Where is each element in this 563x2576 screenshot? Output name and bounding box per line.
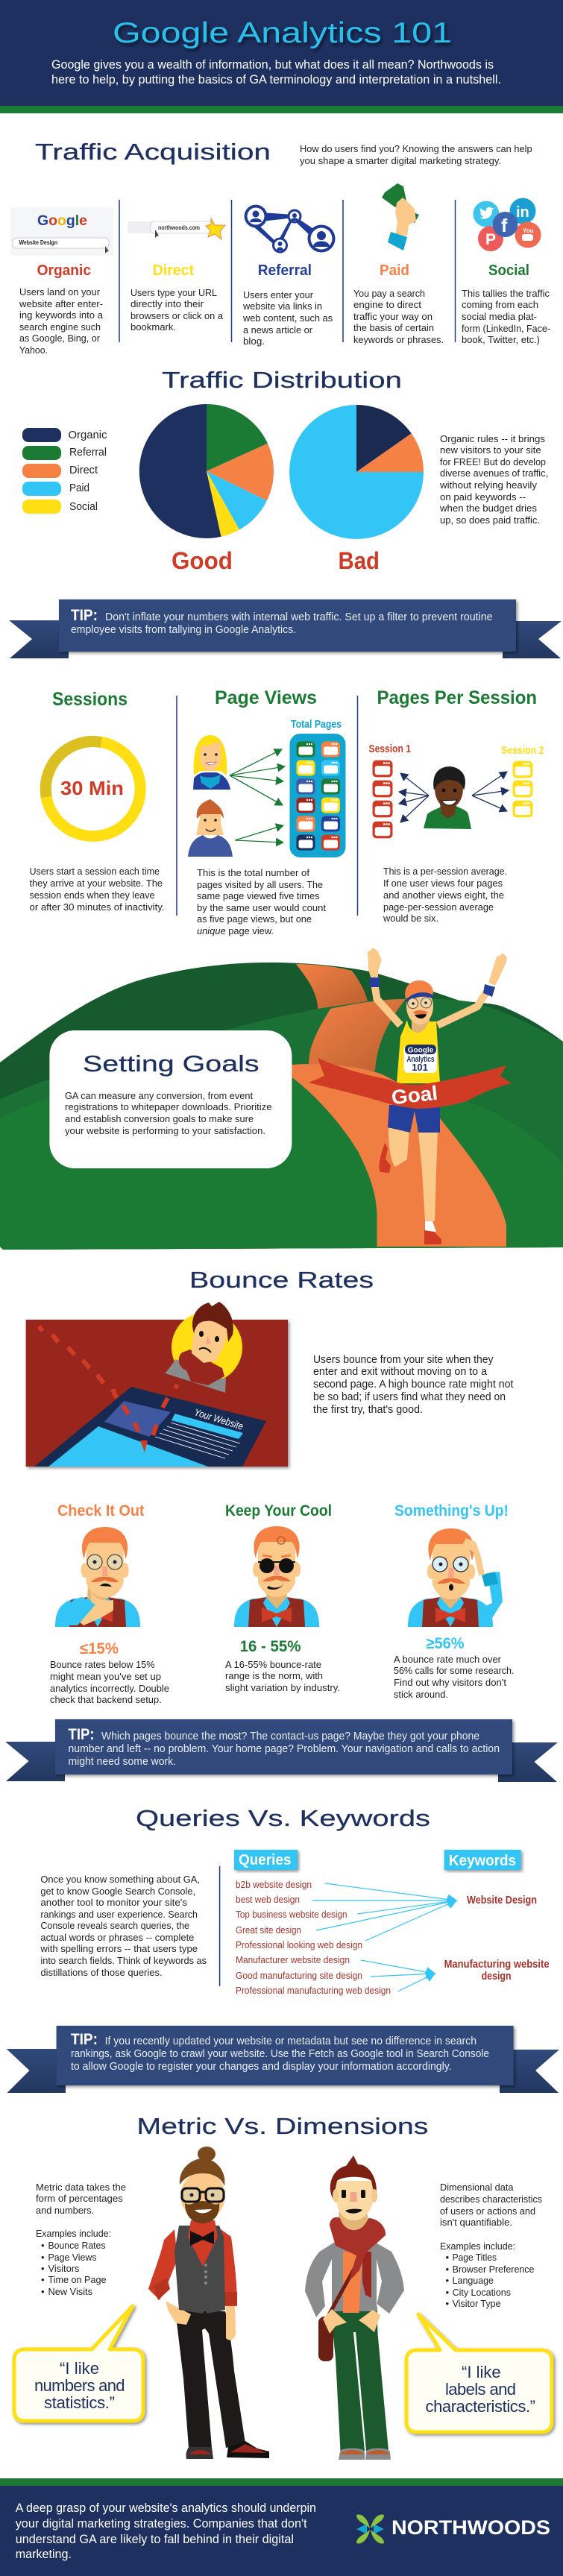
organic text: as Google, Bing, or [19, 333, 101, 344]
footer band [0, 2478, 563, 2576]
queries text: distillations of those queries. [40, 1967, 163, 1978]
speech bubble: dimensions: characteristics.” [425, 2397, 536, 2416]
icon: social bubbles: You [523, 227, 534, 234]
dimensions text: Visitor Type [453, 2298, 501, 2309]
dimensions text: City Locations [453, 2287, 511, 2298]
character: dimension man [305, 2155, 404, 2460]
page views text: as five page views, but one [197, 913, 312, 925]
something's up text: stick around. [394, 1689, 448, 1700]
distribution text: on paid keywords -- [440, 491, 526, 503]
distribution text: Organic rules -- it brings [440, 433, 545, 444]
dimensions text [440, 2182, 542, 2309]
distribution text: for FREE! But do develop [440, 456, 546, 467]
bounce rates text: enter and exit without moving on to a [313, 1366, 488, 1378]
dimensions text: Browser Preference [453, 2264, 534, 2275]
website window [34, 1387, 266, 1467]
panel: paid [353, 183, 444, 345]
heading: check it out: Check It Out [57, 1502, 145, 1520]
heading: keep your cool: Keep Your Cool [225, 1502, 332, 1520]
total pages grid: Total Pages [291, 719, 342, 731]
sessions text [30, 866, 164, 913]
paid text: the basis of certain [353, 322, 434, 333]
setting goals text: registrations to whitepaper downloads. Prioritize [65, 1101, 271, 1112]
metric text: Visitors [48, 2263, 80, 2274]
tip banner 3: If you recently updated your website or metadata but see no difference in search [105, 2035, 476, 2047]
sessions text: session ends when they leave [30, 889, 155, 901]
distribution text [439, 433, 548, 526]
metric text: New Visits [48, 2286, 92, 2297]
arrows: session [399, 772, 509, 822]
keep your cool text: slight variation by industry. [225, 1682, 340, 1693]
total pages grid [289, 719, 346, 857]
referral text: a news article or [243, 324, 313, 336]
referral text: website via links in [242, 300, 322, 312]
check it out text: Bounce rates below 15% [50, 1659, 155, 1670]
icon: address bar: northwoods.com [158, 224, 200, 231]
runner [368, 948, 507, 1244]
header band [0, 0, 563, 113]
header intro text: Google gives you a wealth of information, but what does it all mean? Northwoods is [51, 58, 494, 72]
dimensions text: of users or actions and [440, 2205, 535, 2217]
icon: google search: Google [37, 213, 87, 229]
tip banner 2: number and left -- no problem. Your home page? Problem. Your navigation and calls to action [69, 1743, 500, 1755]
tip banner 2: might need some work. [69, 1756, 176, 1768]
icon: social bubbles: P [485, 231, 496, 248]
organic text: search engine such [19, 321, 101, 333]
character: sunglasses [234, 1526, 319, 1627]
referral text: web content, such as [242, 312, 333, 324]
legend [22, 428, 107, 514]
panel: direct [128, 218, 225, 333]
page views text: pages visited by all users. The [197, 879, 323, 890]
direct text: directly into their [130, 298, 204, 309]
page views text: This is the total number of [197, 867, 309, 878]
heading: setting goals: Setting Goals [83, 1051, 260, 1077]
bounce rates text: be so bad; if users find what they need on [313, 1391, 506, 1403]
keyword: manufacturing website design: design [482, 1971, 512, 1983]
runner: Google [408, 1047, 434, 1054]
social text: form (LinkedIn, Face- [462, 323, 550, 334]
tip banner 2: TIP: [69, 1726, 94, 1743]
dimensions text: Language [453, 2275, 494, 2286]
panel: organic [10, 207, 113, 356]
dimensions text: describes characteristics [440, 2194, 542, 2205]
dimensions text: • [446, 2275, 449, 2286]
panel: social [462, 198, 550, 345]
speech bubble: dimensions: labels and [445, 2380, 517, 2399]
speech bubble: metric: numbers and [34, 2376, 125, 2395]
list: queries: b2b website design [236, 1879, 312, 1890]
goal ribbon: Goal [390, 1082, 438, 1109]
logo: northwoods [356, 2514, 550, 2544]
something's up text: 56% calls for some research. [394, 1665, 515, 1676]
heading: queries vs keywords: Queries Vs. Keywords [136, 1805, 430, 1831]
character: thinking [55, 1527, 140, 1627]
dimensions text: • [446, 2264, 449, 2275]
traffic acquisition intro: How do users find you? Knowing the answers can help [300, 143, 532, 154]
sessions text: Users start a session each time [30, 866, 160, 877]
label: direct: Direct [153, 262, 194, 279]
range: 16 to 55 percent: 16 - 55% [240, 1638, 301, 1655]
distribution text: diverse avenues of traffic, [440, 467, 548, 479]
heading: page views: Page Views [215, 687, 317, 708]
label: organic: Organic [37, 262, 91, 279]
organic text [19, 286, 104, 356]
icon: 30 minute ring [45, 741, 140, 837]
social text [462, 288, 550, 345]
keyword: manufacturing website design: Manufacturing website [444, 1959, 550, 1971]
list: queries: Top business website design [236, 1909, 347, 1920]
pie chart: bad [289, 405, 424, 539]
pages per session text: page-per-session average [383, 901, 494, 913]
paid text [353, 288, 444, 345]
keyword: website design: Website Design [467, 1895, 537, 1906]
label: session 2: Session 2 [501, 745, 544, 757]
bounce rates text [313, 1354, 513, 1416]
list: queries: Manufacturer website design [236, 1954, 350, 1965]
keep your cool text: A 16-55% bounce-rate [225, 1659, 321, 1670]
keep your cool text [225, 1659, 340, 1693]
bounce rates text: the first try, that's good. [313, 1404, 423, 1416]
panel: keep your cool [225, 1502, 340, 1693]
organic text: Yahoo. [19, 344, 48, 356]
tip banner 2: Which pages bounce the most? The contact-us page? Maybe they got your phone [101, 1731, 479, 1742]
metric text: • [41, 2286, 45, 2297]
header intro text [51, 58, 501, 86]
heading: sessions: Sessions [52, 689, 128, 710]
dimensions text: • [446, 2252, 449, 2263]
dimensions text: Page Titles [453, 2252, 497, 2263]
paid text: traffic your way on [353, 311, 433, 322]
speech bubble: dimensions: “I like [462, 2363, 502, 2381]
metric text: Time on Page [48, 2274, 106, 2285]
footer text: understand GA are likely to fall behind in their digital [16, 2532, 294, 2546]
traffic acquisition intro: you shape a smarter digital marketing strategy. [300, 155, 501, 166]
range: 56 percent or more: ≥56% [427, 1635, 465, 1652]
page views text [197, 867, 326, 936]
panel: check it out [50, 1502, 169, 1705]
footer text: your digital marketing strategies. Companies that don't [16, 2516, 307, 2531]
paid text: You pay a search [353, 288, 425, 299]
pie chart: good [139, 404, 274, 538]
heading: traffic distribution: Traffic Distribution [162, 367, 402, 393]
list: queries: Good manufacturing site design [236, 1970, 362, 1981]
range: 15 percent or less: ≤15% [80, 1640, 119, 1657]
heading: pages per session: Pages Per Session [377, 687, 537, 708]
speech bubble: metric [14, 2306, 143, 2421]
icon: man in green shirt [424, 766, 471, 829]
road [292, 964, 506, 1247]
referral text: blog. [243, 336, 265, 347]
setting goals text: your website is performing to your satisfaction. [65, 1125, 265, 1136]
icon: 30 minute ring: 30 Min [60, 777, 124, 799]
heading: bounce rates: Bounce Rates [189, 1267, 374, 1293]
pages per session text: If one user views four pages [383, 878, 503, 889]
distribution text: without relying heavily [439, 479, 537, 491]
goal ribbon [309, 1058, 512, 1109]
website window: Your Website [193, 1406, 245, 1432]
title: Google Analytics 101 [113, 17, 452, 49]
icon: google search: Website Design [19, 239, 57, 246]
queries text: get to know Google Search Console, [40, 1886, 195, 1897]
legend: Referral [69, 447, 107, 459]
icon: address bar [128, 218, 225, 239]
keyword: manufacturing website design [444, 1959, 550, 1983]
organic text: Users land on your [19, 286, 101, 297]
tip banner 1 [9, 599, 562, 658]
footer text: marketing. [16, 2547, 72, 2561]
hills [0, 963, 563, 1250]
icon: hand with money [382, 183, 419, 251]
dashed bounce trail [39, 1326, 177, 1452]
label: bad: Bad [339, 547, 380, 574]
tip banner 1: TIP: [71, 607, 98, 624]
social text: book, Twitter, etc.) [462, 334, 540, 345]
box: keywords: Keywords [449, 1853, 516, 1869]
panel: sessions [30, 689, 164, 913]
pages per session text: This is a per-session average. [383, 866, 507, 877]
panel: page views [188, 687, 346, 936]
distribution text: new visitors to your site [440, 444, 541, 456]
list: queries: Professional manufacturing web design [236, 1985, 391, 1996]
label: session 1: Session 1 [368, 743, 411, 755]
queries text: Console reveals search queries, the [40, 1920, 189, 1931]
heading: traffic acquisition: Traffic Acquisition [35, 139, 271, 165]
page views text: same page viewed five times [197, 890, 320, 901]
yellow circle and frustrated user [166, 1302, 242, 1393]
page views text: by the same user would count [197, 902, 326, 913]
label: good: Good [172, 547, 233, 574]
keep your cool text: range is the norm, with [225, 1670, 323, 1681]
queries text: into search fields. Think of keywords as [40, 1955, 207, 1966]
something's up text: Find out why visitors don't [394, 1677, 506, 1688]
check it out text: check that backend setup. [50, 1694, 162, 1705]
queries text: another tool to monitor your site's [40, 1897, 187, 1908]
page views text: unique page view. [197, 925, 274, 936]
queries text: rankings and user experience. Search [40, 1909, 198, 1920]
direct text: Users type your URL [130, 287, 217, 298]
organic text: website after enter- [19, 298, 103, 309]
runner: 101 [412, 1062, 428, 1073]
speech bubble: dimensions [406, 2314, 552, 2432]
distribution text: up, so does paid traffic. [440, 514, 540, 526]
heading: something's up: Something's Up! [394, 1502, 509, 1520]
paid text: keywords or phrases. [353, 334, 444, 345]
metric text: Examples include: [36, 2228, 111, 2239]
pages per session text: would be six. [383, 913, 438, 924]
tip banner 3 [7, 2026, 559, 2093]
arrows: user to pages [230, 749, 285, 843]
check it out text: might mean you've set up [50, 1671, 161, 1682]
dimensions text: • [446, 2298, 449, 2309]
tip banner 1: employee visits from tallying in Google Analytics. [71, 624, 296, 636]
distribution text: when the budget dries [439, 503, 537, 514]
tip banner 3: to allow Google to register your changes and display your information accordingly. [71, 2061, 452, 2073]
setting goals text: and establish conversion goals to make sure [65, 1113, 254, 1124]
session 2 pages [513, 761, 532, 817]
traffic acquisition intro [300, 143, 532, 166]
legend: Direct [69, 465, 98, 476]
tip banner 3: rankings, ask Google to crawl your website. Use the Fetch as Google tool in Search Console [71, 2048, 489, 2060]
session 1 pages [373, 760, 392, 838]
label: social: Social [488, 262, 529, 279]
icon: social bubbles: f [501, 215, 508, 236]
pages per session text: and another views eight, the [383, 889, 504, 901]
something's up text: A bounce rate much over [394, 1654, 502, 1665]
metric text: • [41, 2274, 45, 2285]
something's up text [394, 1654, 515, 1700]
legend: Social [69, 501, 98, 513]
list: queries: best web design [236, 1894, 300, 1905]
social text: coming from each [462, 299, 538, 310]
runner: Analytics [407, 1055, 434, 1064]
bounce rates text: second page. A high bounce rate might not [313, 1379, 513, 1391]
label: referral: Referral [258, 262, 312, 279]
queries text: Once you know something about GA, [40, 1874, 200, 1885]
dimensions text: isn't quantifiable. [440, 2217, 512, 2228]
footer text: A deep grasp of your website's analytics should underpin [16, 2501, 316, 2515]
social text: social media plat- [462, 311, 537, 322]
metric text: • [41, 2240, 45, 2251]
icon: social bubbles [473, 198, 541, 251]
list: queries: Professional looking web design [236, 1939, 362, 1950]
bounce rates text: Users bounce from your site when they [313, 1354, 494, 1366]
metric text: Metric data takes the [36, 2182, 126, 2193]
icon: red-haired man [188, 799, 233, 857]
sessions text: or after 30 minutes of inactivity. [30, 901, 164, 913]
legend: Organic [69, 429, 107, 441]
panel: pages per session [368, 687, 544, 924]
referral text: Users enter your [243, 289, 314, 300]
metric text: Page Views [48, 2252, 97, 2263]
tip banner 3: TIP: [71, 2031, 98, 2048]
icon: google search [10, 207, 113, 256]
dimensions text: Examples include: [440, 2240, 515, 2252]
panel: referral [242, 205, 336, 347]
icon: social bubbles: in [516, 204, 529, 221]
logo: northwoods: NORTHWOODS [391, 2516, 550, 2539]
sessions text: they arrive at your website. The [30, 878, 163, 889]
paid text: engine to direct [353, 299, 421, 310]
speech bubble: metric: “I like [60, 2359, 100, 2378]
setting goals text [65, 1090, 271, 1136]
metric text: • [41, 2252, 45, 2263]
list: queries [236, 1879, 391, 1996]
icon: blonde woman [193, 735, 230, 790]
direct text: bookmark. [130, 321, 176, 333]
organic text: ing keywords into a [19, 309, 104, 321]
label: paid: Paid [380, 262, 409, 279]
panel: setting goals scene [0, 948, 563, 1250]
icon: network [245, 205, 336, 253]
check it out text: analytics incorrectly. Double [50, 1683, 169, 1694]
tip banner 2 [5, 1719, 558, 1782]
metric text: Bounce Rates [48, 2240, 106, 2251]
queries text [40, 1874, 207, 1978]
speech bubble: metric: statistics.” [44, 2393, 116, 2412]
metric text [36, 2182, 126, 2297]
social text: This tallies the traffic [462, 288, 550, 299]
check it out text [50, 1659, 169, 1705]
direct text [130, 287, 224, 333]
character: hipster metric man [148, 2147, 269, 2459]
footer text [16, 2501, 316, 2561]
queries text: actual words or phrases -- complete [40, 1932, 194, 1943]
metric text: form of percentages [36, 2193, 123, 2204]
tip banner 1: Don't inflate your numbers with internal web traffic. Set up a filter to prevent routine [105, 611, 492, 623]
dimensions text: Dimensional data [440, 2182, 514, 2193]
referral text [242, 289, 333, 347]
white text card [49, 1030, 292, 1168]
direct text: browsers or click on a [130, 310, 224, 321]
header intro text: here to help, by putting the basics of GA terminology and interpretation in a nutshell. [51, 73, 501, 86]
metric text: • [41, 2263, 45, 2274]
legend: Paid [69, 482, 89, 494]
dimensions text: • [446, 2287, 449, 2298]
metric text: and numbers. [36, 2205, 94, 2216]
setting goals text: GA can measure any conversion, from event [65, 1090, 253, 1101]
box: queries: Queries [239, 1852, 291, 1868]
character: surprised [408, 1528, 503, 1627]
queries text: with spelling errors -- that users type [40, 1943, 198, 1954]
heading: metric vs dimensions: Metric Vs. Dimensions [136, 2113, 428, 2139]
arrows: queries to keywords [312, 1883, 456, 1991]
illustration: bouncing user [26, 1302, 288, 1467]
panel: something's up [394, 1502, 515, 1700]
list: queries: Great site design [236, 1924, 301, 1936]
pages per session text [383, 866, 507, 924]
